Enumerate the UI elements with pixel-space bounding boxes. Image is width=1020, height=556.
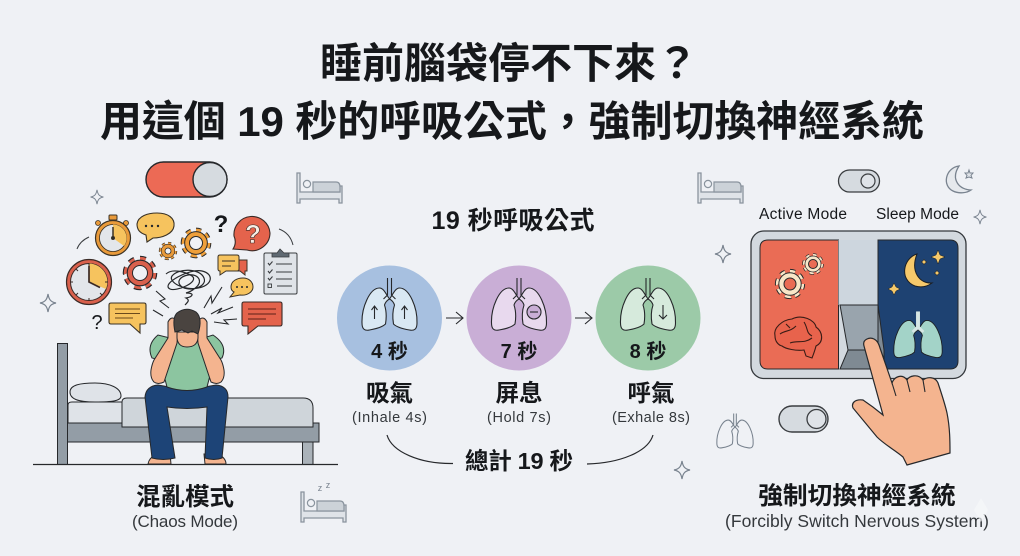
jeans <box>145 385 228 460</box>
question marks <box>91 211 228 334</box>
icon: bed top left <box>297 173 342 203</box>
caption: switch nervous system: (Forcibly Switch Nervous System) <box>725 511 989 531</box>
icon: red gear <box>127 260 153 286</box>
icon: yellow rect bubble <box>109 303 146 333</box>
arrow <box>575 312 592 324</box>
icon: sleeping bed: z <box>318 483 323 493</box>
label: sleep mode: Sleep Mode <box>876 206 959 223</box>
shirt <box>150 335 224 390</box>
sparkle <box>715 245 731 263</box>
sleep side <box>878 240 958 369</box>
icon: wall clock <box>66 260 112 304</box>
sparkles <box>40 190 103 312</box>
arrow <box>446 312 463 324</box>
icon: orange gear <box>185 232 207 254</box>
panel: chaos mode <box>33 162 346 531</box>
arcs <box>77 229 293 249</box>
icon: pointing hand <box>852 338 950 465</box>
icon: sleeping bed: z <box>326 480 331 490</box>
duration: 4 秒 <box>371 340 408 363</box>
icon: chat bubbles <box>218 255 247 275</box>
icon: scribble <box>166 270 210 305</box>
title <box>100 40 924 145</box>
sparkle <box>674 461 690 479</box>
active side <box>760 240 838 369</box>
icon: red rect bubble <box>242 302 282 334</box>
stress bolts <box>153 287 237 324</box>
floor line <box>33 464 338 466</box>
icon: moon <box>905 254 932 287</box>
lungs exhale <box>620 278 676 330</box>
switch center <box>838 240 884 369</box>
arms <box>151 318 224 384</box>
switch edge <box>878 305 884 369</box>
watermark <box>974 498 988 522</box>
icon: clipboard <box>264 249 297 294</box>
toggle: small top <box>838 170 880 192</box>
lungs inhale <box>362 278 417 330</box>
icon: small lungs <box>717 413 753 448</box>
heading: 19 秒呼吸公式 <box>432 207 594 235</box>
label: active mode: Active Mode <box>759 206 847 223</box>
caption: (Inhale 4s) <box>352 410 427 426</box>
duration: 8 秒 <box>630 340 666 363</box>
caption: (Exhale 8s) <box>612 410 690 426</box>
person <box>145 309 228 464</box>
icon: red question bubble: ? <box>245 219 261 249</box>
duration: 7 秒 <box>501 340 537 363</box>
icon: gears <box>779 256 821 295</box>
total label: 總計 19 秒 <box>465 448 573 474</box>
head <box>177 332 198 347</box>
heading: switch nervous system: 強制切換神經系統 <box>758 482 956 510</box>
icon: dots bubble <box>230 278 253 297</box>
step: exhale <box>596 266 700 426</box>
finger creases <box>892 380 925 396</box>
label: 吸氣 <box>366 380 413 406</box>
icon: brain <box>775 317 822 358</box>
caption: (Hold 7s) <box>487 410 551 426</box>
title: 睡前腦袋停不下來？ <box>320 40 698 87</box>
icon: small gear <box>161 244 175 258</box>
title: 用這個 19 秒的呼吸公式，強制切換神經系統 <box>100 98 924 145</box>
step: hold <box>466 266 572 426</box>
bed <box>58 344 319 464</box>
icon: moon and star <box>946 166 973 193</box>
total bracket <box>387 435 653 464</box>
feet <box>148 454 226 464</box>
question marks: ? <box>91 312 103 334</box>
icon: red question bubble <box>233 216 270 251</box>
stars <box>888 250 945 295</box>
sparkle <box>974 210 986 224</box>
label: 呼氣 <box>628 380 674 406</box>
caption: chaos mode: (Chaos Mode) <box>132 512 238 531</box>
toggle: red on <box>146 162 227 197</box>
toggle: lower <box>779 406 828 432</box>
heading: chaos mode: 混亂模式 <box>136 483 234 511</box>
panel: switch device <box>751 231 966 378</box>
step: inhale <box>337 266 442 426</box>
hair <box>174 309 200 334</box>
icon: lungs teal <box>894 312 942 358</box>
icon: bed top right <box>698 173 743 203</box>
lungs hold <box>491 278 547 330</box>
question marks: ? <box>214 211 228 238</box>
icon: stopwatch <box>96 215 130 256</box>
icon: sleeping bed <box>301 480 346 522</box>
label: 屏息 <box>496 380 542 406</box>
icon: yellow speech bubble <box>137 213 174 242</box>
panel: breathing formula <box>337 207 700 474</box>
